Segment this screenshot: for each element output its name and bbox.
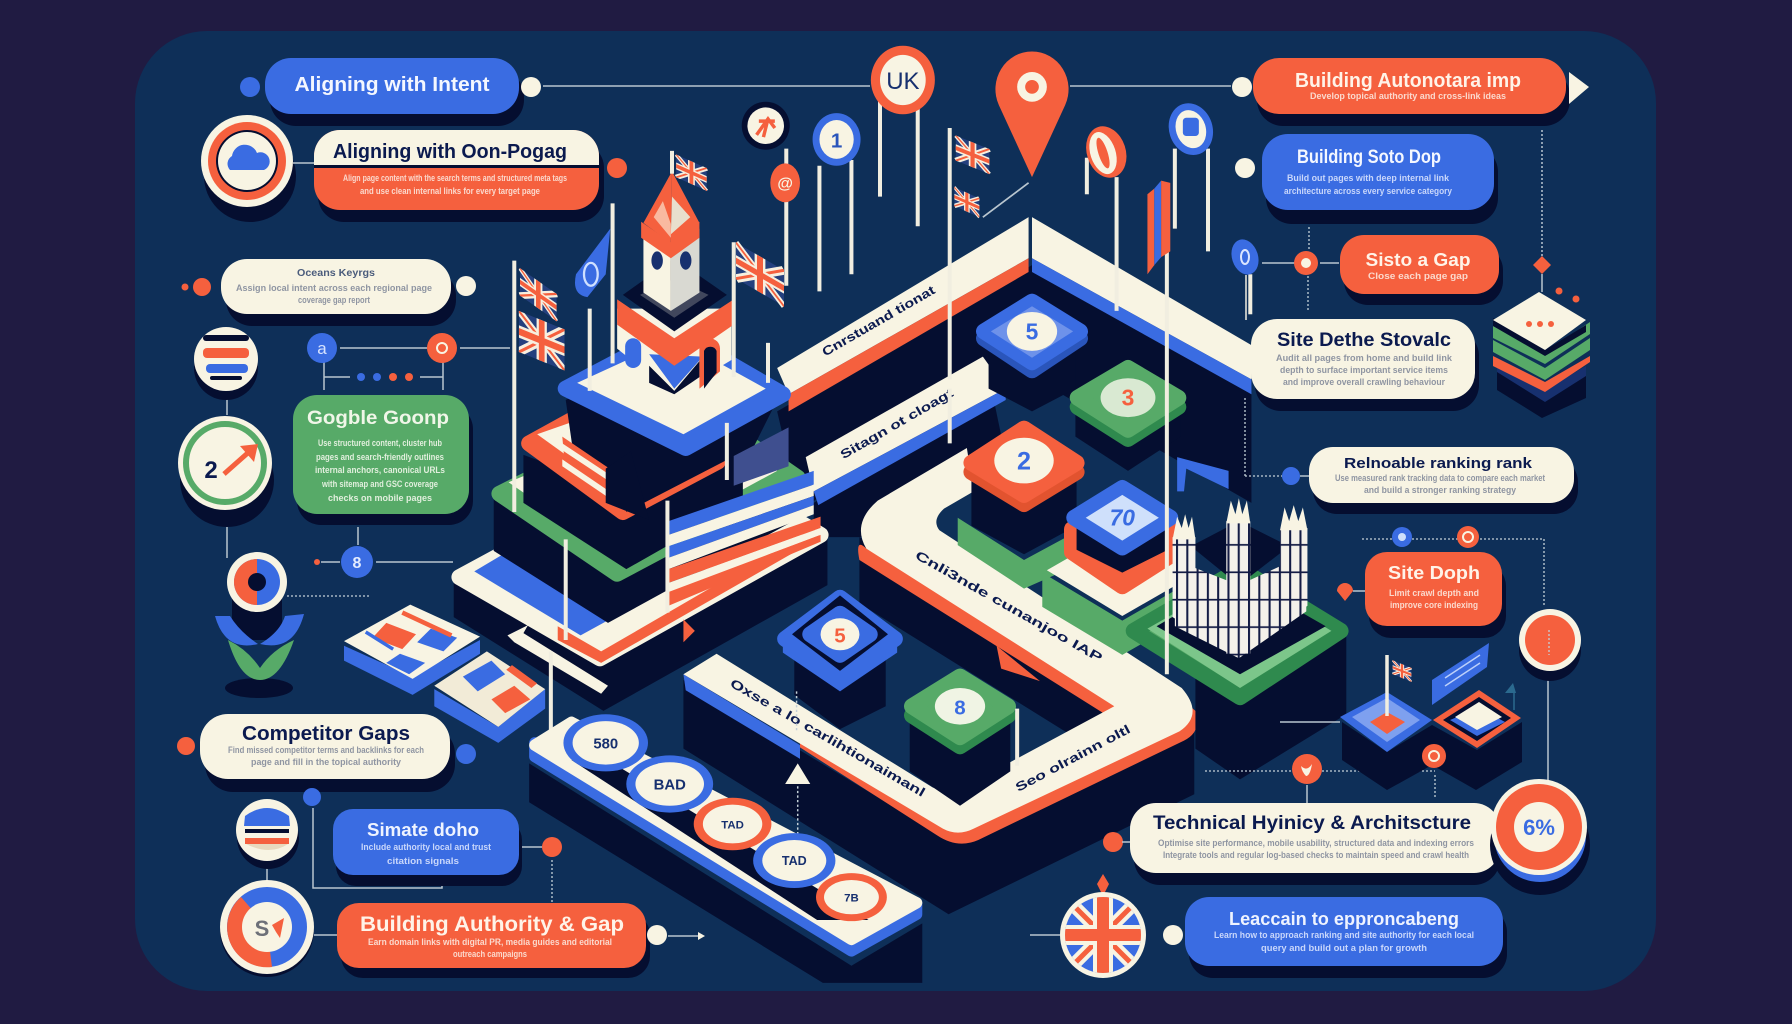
- pole with small flag in loop: [683, 619, 1040, 834]
- panel: building authority and gap: Building Authority & Gap: [360, 913, 624, 936]
- panel: aligning with on-page: Aligning with Oon-Pogag: [333, 141, 567, 163]
- big loop track: [683, 448, 1197, 914]
- panel: learn to approach: Learn how to approach ranking and site authority for each local: [1214, 930, 1474, 940]
- panel: site a gap: Sisto a Gap: [1366, 250, 1470, 270]
- percentage badge: 6%: [1523, 815, 1555, 840]
- castle tower: [617, 171, 734, 394]
- track: upper road with two arms: Cnrstuand tionat: [820, 283, 938, 359]
- icon: number 2 with arrow: [178, 416, 274, 527]
- panel: oceans keyrgs: Assign local intent across each regional page: [236, 283, 432, 293]
- panel: green google group: [293, 395, 473, 525]
- icon: small blue 8: [314, 546, 373, 578]
- panel: green google group: Gogble Goonp: [307, 408, 449, 429]
- parliament building: [1173, 498, 1307, 658]
- panel: competitor gaps: [177, 714, 476, 806]
- panel: building site depth: architecture across every service category: [1284, 186, 1452, 196]
- isometric flag islands: [1340, 643, 1522, 790]
- coin 1: [563, 714, 648, 771]
- panel: building authority and gap: Earn domain links with digital PR, media guides and editorial: [368, 937, 612, 947]
- panel: simate doho: Simate doho: [367, 820, 479, 840]
- icon: coral badge above technical: [1292, 754, 1322, 784]
- icon: number 2 with arrow: 2: [204, 457, 218, 484]
- icon: cloud badge: [201, 115, 314, 222]
- badge: blue oval: [1162, 97, 1220, 161]
- track: upper road with two arms: [777, 217, 1251, 509]
- icons: a and coral badge: [307, 333, 457, 363]
- panel: reliable ranking: Use measured rank tracking data to compare each market: [1335, 473, 1545, 483]
- book stripes on plinth: [669, 471, 821, 606]
- panel: site depth: Site Doph: [1388, 563, 1480, 583]
- panel: site depth: [1337, 552, 1506, 638]
- panel: learn to approach: [1185, 897, 1507, 978]
- icon: donut and leaves: [215, 552, 304, 698]
- panel: learn to approach: query and build out a plan for growth: [1261, 943, 1427, 953]
- panel: site depth strategy: Site Dethe Stovalc: [1277, 330, 1451, 351]
- panel: building site depth: Building Soto Dop: [1297, 147, 1441, 168]
- icon: lower stripe circle: [236, 799, 299, 869]
- track: second road: [806, 357, 1006, 537]
- panel: site depth: Limit crawl depth and: [1389, 588, 1479, 598]
- big loop track: Seo olrainn oltl: [1013, 722, 1133, 795]
- badge: coral oval: [1080, 121, 1133, 183]
- white arrows: [507, 625, 608, 737]
- panel: technical hygiene and architecture: Technical Hyinicy & Architscture: [1153, 813, 1471, 834]
- coin 4: [753, 833, 835, 888]
- panel: green google group: pages and search-friendly outlines: [316, 452, 444, 462]
- panel: green google group: internal anchors, canonical URLs: [315, 465, 445, 475]
- coin 5: 7B: [844, 893, 859, 905]
- panel: competitor gaps: Competitor Gaps: [242, 723, 410, 745]
- big loop track: Oxse a lo carlihtionaimanl: [728, 676, 928, 800]
- panel: site a gap: Close each page gap: [1368, 271, 1469, 281]
- tower plinth stack: [454, 331, 827, 711]
- panel: technical hygiene and architecture: Optimise site performance, mobile usability, structured data and indexing errors: [1158, 838, 1474, 848]
- numbered block 2 stack: [958, 429, 1081, 589]
- panel: building site depth: [1235, 134, 1498, 224]
- panel: technical hygiene and architecture: Integrate tools and regular log-based checks to maintain speed and crawl health: [1163, 850, 1469, 860]
- coin 5: [816, 873, 887, 921]
- coin 3: [694, 798, 771, 850]
- badge: UK: UK: [886, 68, 920, 95]
- panel: aligning with intent: Aligning with Intent: [294, 74, 490, 96]
- percentage badge: [1490, 779, 1590, 895]
- big loop track: Cnli3nde cunanjoo IAP: [913, 548, 1105, 665]
- panel: competitor gaps: page and fill in the topical authority: [251, 757, 401, 767]
- panel: building site depth: Build out pages with deep internal link: [1287, 173, 1450, 183]
- panel: simate doho: Include authority local and trust: [361, 842, 491, 852]
- panel: aligning with on-page: Align page content with the search terms and structured meta tags: [343, 173, 567, 183]
- top pole badges: [742, 46, 1250, 314]
- numbered block 8: 8: [954, 696, 966, 719]
- numbered block 70 stack: [1042, 488, 1202, 655]
- panel: site depth strategy: Audit all pages from home and build link: [1276, 353, 1453, 363]
- panel: reliable ranking: [1282, 447, 1578, 514]
- numbered block 3: 3: [1122, 385, 1134, 411]
- panel: technical hygiene and architecture: [1103, 803, 1500, 885]
- badge: number 1: [813, 113, 861, 166]
- panel: site a gap: [1340, 235, 1503, 305]
- newspaper cards: [344, 605, 545, 743]
- icon: small blue 8: 8: [353, 555, 362, 572]
- numbered block 5: [984, 302, 1080, 411]
- badge: runner: [742, 102, 790, 150]
- panel: building authority and gap: [337, 903, 705, 978]
- central isometric map: [344, 46, 1346, 983]
- panel: aligning with on-page: and use clean internal links for every target page: [360, 186, 540, 196]
- coin 2: [626, 755, 713, 813]
- panel: reliable ranking: Relnoable ranking rank: [1344, 455, 1533, 472]
- long pole and small flags: [950, 128, 1170, 674]
- parliament on green base: [1134, 457, 1346, 779]
- panel: simate doho: [333, 809, 562, 886]
- numbered block 5: 5: [1026, 318, 1039, 344]
- track: second road: Sitagn ot cloagt: [838, 385, 957, 462]
- icon: pie chart: S: [255, 916, 269, 941]
- panel: site depth: improve core indexing: [1390, 600, 1478, 610]
- numbered block 3: [1075, 368, 1181, 471]
- panel: building autonomous map: Develop topical authority and cross-link ideas: [1310, 91, 1506, 101]
- badge: UK: [871, 46, 935, 114]
- panel: site depth strategy: depth to surface important service items: [1280, 365, 1448, 375]
- panel: oceans keyrgs: [182, 259, 476, 326]
- flagpoles around tower: [514, 151, 784, 640]
- badge: coral at: [770, 163, 800, 202]
- panel: green google group: with sitemap and GSC coverage: [321, 479, 438, 489]
- numbered block 70 stack: 70: [1110, 505, 1135, 531]
- panel: building autonomous map: Building Autonotara imp: [1295, 70, 1521, 92]
- map pin: [995, 51, 1069, 177]
- coin 4: TAD: [782, 854, 807, 868]
- panel: green google group: checks on mobile pages: [328, 493, 432, 503]
- icon: stripe circle: [194, 327, 258, 400]
- panel: simate doho: citation signals: [387, 856, 459, 866]
- numbered block 2 stack: 2: [1017, 448, 1031, 476]
- panel: learn to approach: Leaccain to epproncabeng: [1229, 909, 1459, 929]
- bottom coin tray: [529, 714, 922, 983]
- coin 2: BAD: [654, 778, 686, 794]
- dots row: [357, 373, 413, 381]
- icons: a and coral badge: a: [317, 339, 327, 358]
- panel: oceans keyrgs: coverage gap report: [298, 295, 370, 305]
- badge: number 1: 1: [831, 129, 842, 152]
- panel: green google group: Use structured content, cluster hub: [318, 438, 442, 448]
- connector lines: [227, 86, 1548, 936]
- panel: building autonomous map: [1232, 58, 1589, 126]
- panel: reliable ranking: and build a stronger ranking strategy: [1364, 485, 1516, 495]
- diamond marker: [1533, 256, 1551, 274]
- coin 1: 580: [593, 737, 618, 753]
- panel: site depth strategy: and improve overall crawling behaviour: [1283, 377, 1445, 387]
- numbered block 5 dark: [783, 595, 897, 729]
- icon: pie chart: [220, 880, 337, 977]
- panel: building authority and gap: outreach campaigns: [453, 949, 527, 959]
- icons: pair above site depth: [1392, 526, 1479, 548]
- numbered block 8: [910, 677, 1010, 806]
- background panel: [135, 31, 1656, 991]
- coin 3: TAD: [721, 820, 744, 832]
- panel: aligning with on-page: [314, 130, 627, 222]
- icon: union flag circle: [1060, 874, 1183, 978]
- icon: layered stack: [1493, 288, 1590, 418]
- panel: aligning with intent: [240, 58, 541, 126]
- numbered block 5 dark: 5: [834, 624, 846, 647]
- panel: competitor gaps: Find missed competitor terms and backlinks for each: [228, 745, 424, 755]
- badge: coral at: @: [777, 176, 793, 193]
- panel: site depth strategy: [1251, 319, 1479, 411]
- panel: oceans keyrgs: Oceans Keyrgs: [297, 268, 375, 279]
- icon: coral circle: [1519, 609, 1581, 681]
- icons: oval and coral badge: [1227, 236, 1318, 320]
